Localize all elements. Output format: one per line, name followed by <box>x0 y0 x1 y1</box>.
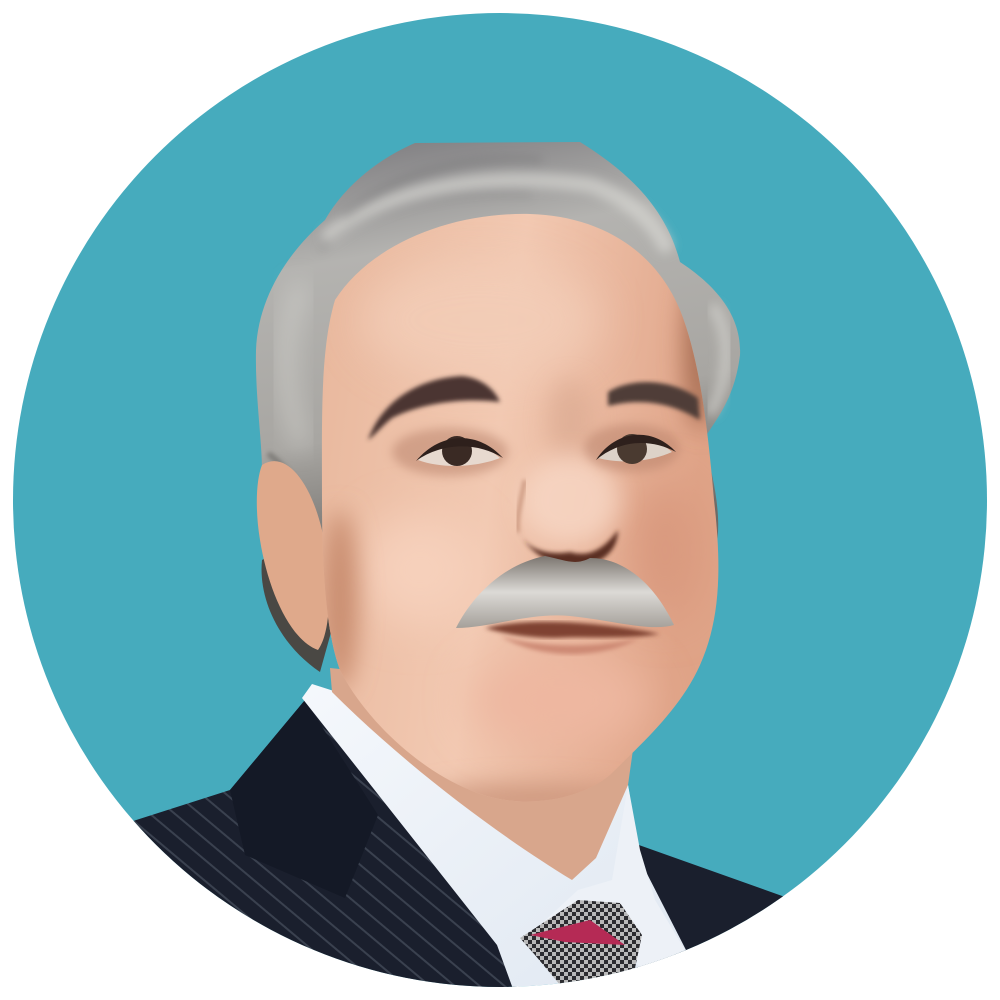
ear <box>257 461 329 650</box>
hair strands <box>270 159 726 560</box>
forehead highlight <box>366 274 597 362</box>
mouth <box>485 622 660 654</box>
cheek shading <box>364 517 462 620</box>
right eye <box>584 424 680 472</box>
tie <box>520 900 642 985</box>
neck <box>330 668 640 880</box>
person <box>100 142 785 1000</box>
jacket <box>100 700 785 1000</box>
hair back <box>262 559 330 672</box>
moustache <box>456 556 674 628</box>
right eyebrow <box>608 382 700 420</box>
hair <box>256 142 740 570</box>
left eyebrow <box>368 376 500 440</box>
chin shadow <box>448 774 596 802</box>
nose <box>517 480 618 566</box>
left eye <box>392 428 508 476</box>
shirt collar <box>302 684 686 1000</box>
face <box>322 214 718 816</box>
